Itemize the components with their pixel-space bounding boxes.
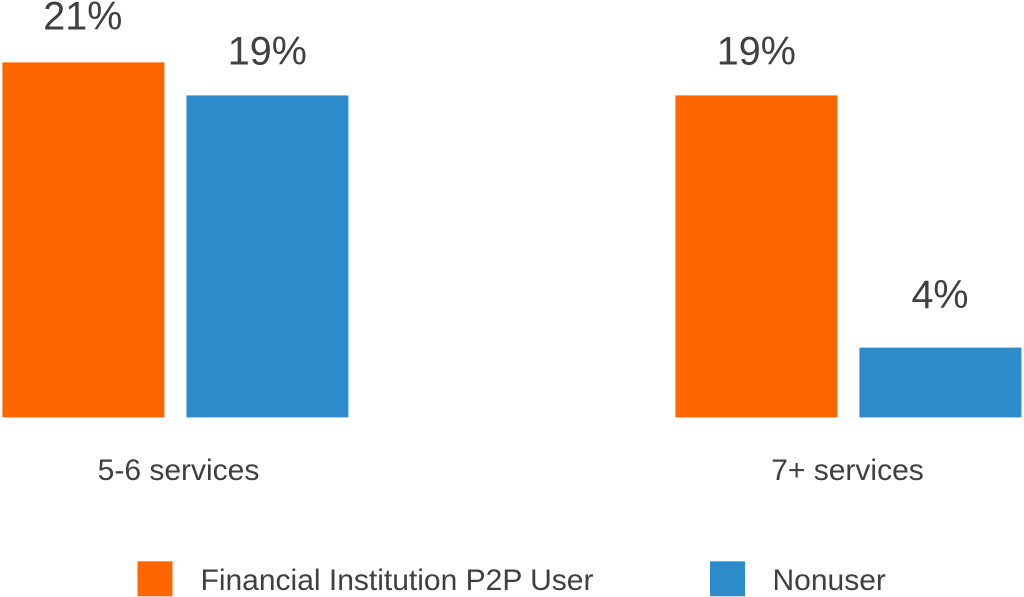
value: 4%: 4% [911, 273, 969, 317]
value: 19%: 19% [228, 30, 307, 74]
legend [138, 561, 886, 597]
group: 5-6 services [2, 0, 348, 487]
group: 7+ services [675, 30, 1021, 487]
bar: 5-6 services Financial Institution P2P User [2, 62, 164, 417]
value: 19%: 19% [717, 30, 796, 74]
legend label: Nonuser: Nonuser [772, 564, 886, 597]
legend label: Financial Institution P2P User: Financial Institution P2P User [200, 564, 593, 597]
axis label: 5-6 services: 5-6 services [98, 454, 259, 487]
bar: 7+ services Financial Institution P2P User [675, 95, 837, 417]
legend swatch: Nonuser [710, 561, 745, 596]
bar: 7+ services Nonuser [859, 348, 1021, 417]
legend swatch: Financial Institution P2P User [138, 561, 172, 596]
axis label: 7+ services: 7+ services [771, 454, 924, 487]
bar: 5-6 services Nonuser [186, 95, 348, 417]
